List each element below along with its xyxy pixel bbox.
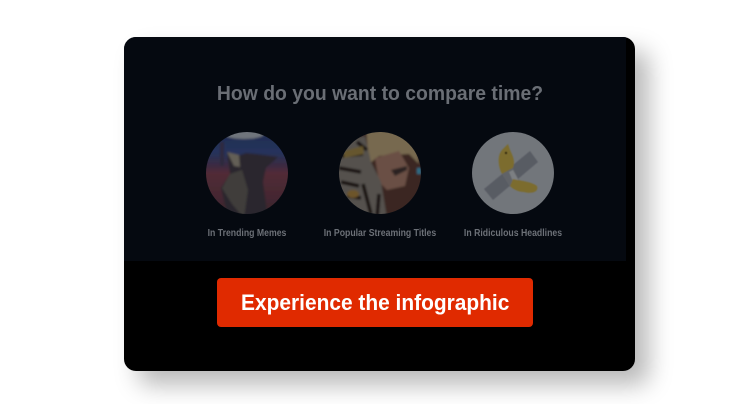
label: ridiculous headlines: In Ridiculous Headlines [464, 228, 562, 239]
icon: big cat keeper portrait [339, 132, 421, 214]
label: streaming titles: In Popular Streaming Titles [324, 228, 436, 239]
label: trending memes: In Trending Memes [208, 228, 286, 239]
button: call to action [217, 278, 533, 327]
icon: baby alien meme [206, 132, 288, 214]
card [124, 37, 635, 371]
panel: comparison chooser [124, 37, 626, 261]
title: How do you want to compare time? [217, 82, 543, 105]
icon: taped banana [472, 132, 554, 214]
button: call to action: Experience the infographic [241, 290, 509, 315]
